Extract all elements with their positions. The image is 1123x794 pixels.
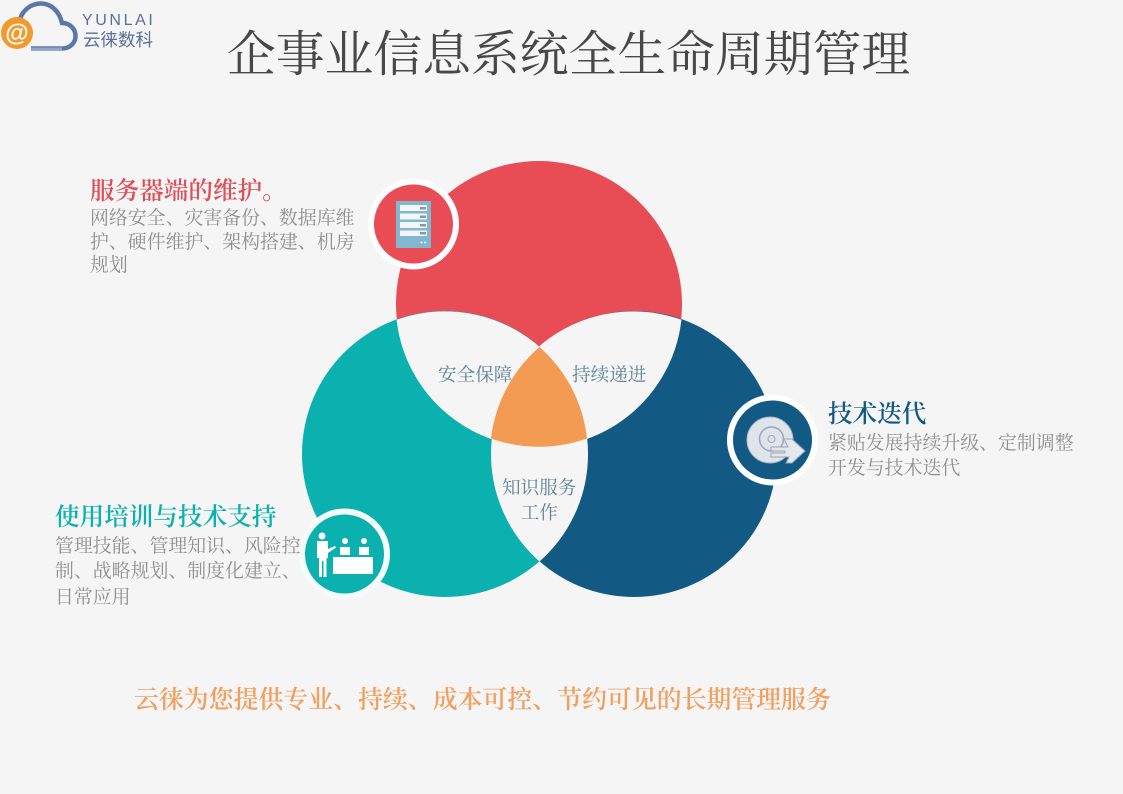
label: 持续递进: 持续递进 (572, 365, 646, 386)
heading: 技术迭代 (828, 401, 926, 428)
text block: technology iteration (828, 401, 1074, 479)
description (55, 536, 301, 608)
center overlap: orange (491, 347, 587, 447)
logo wordmark: YUNLAI (82, 12, 155, 29)
description (828, 432, 1074, 479)
icon: cloud: @ (5, 20, 29, 47)
text block: server maintenance (90, 178, 354, 276)
description: 规划 (90, 255, 128, 276)
label: 知识服务工作 (502, 478, 576, 524)
description: 护、硬件维护、架构搭建、机房 (90, 232, 354, 252)
circle: teal (302, 311, 588, 597)
description: 开发与技术迭代 (828, 458, 960, 479)
description: 管理技能、管理知识、风险控 (55, 536, 301, 557)
circle: red (396, 161, 682, 447)
label: 知识服务工作: 知识服务 (502, 478, 576, 499)
description: 紧贴发展持续升级、定制调整 (828, 433, 1074, 454)
label: 知识服务工作: 工作 (521, 503, 558, 524)
description: 制、战略规划、制度化建立、 (55, 561, 301, 582)
heading: 使用培训与技术支持 (55, 504, 276, 531)
icon: disc badge (730, 398, 815, 482)
title: 企事业信息系统全生命周期管理 (227, 28, 910, 82)
icon: cloud (1, 4, 76, 49)
footer slogan: 云徕为您提供专业、持续、成本可控、节约可见的长期管理服务 (134, 687, 831, 714)
overlap: red and blue (491, 312, 681, 447)
label: 安全保障: 安全保障 (438, 365, 512, 386)
text block: training and support (55, 504, 301, 608)
description: 网络安全、灾害备份、数据库维 (90, 208, 354, 229)
logo (1, 1, 155, 51)
description (90, 208, 354, 276)
overlap: red and teal (397, 312, 587, 447)
description: 日常应用 (55, 587, 131, 608)
icon: training badge (302, 512, 387, 596)
logo chinese name: 云徕数科 (83, 30, 153, 50)
overlap: teal and blue (491, 347, 588, 561)
icon: server badge (371, 182, 456, 266)
heading: 服务器端的维护。 (90, 178, 287, 205)
circle: blue (491, 311, 777, 597)
